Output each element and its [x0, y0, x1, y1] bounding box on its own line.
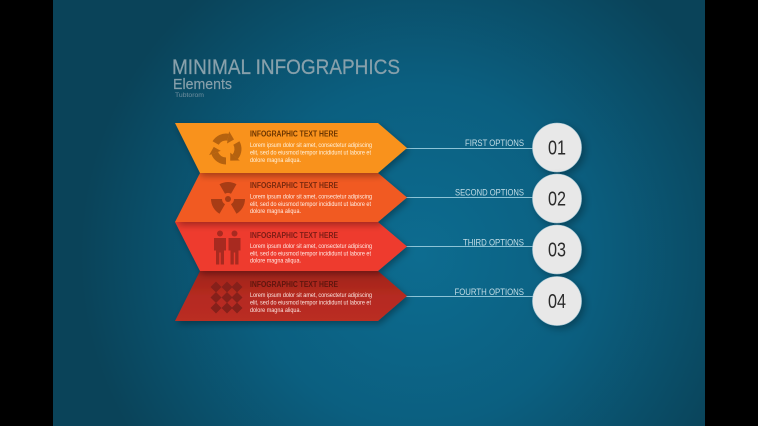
icon: two people [214, 230, 240, 264]
text block: row 2: elit, sed do eiusmod tempor incididunt ut labore et [250, 201, 371, 208]
number circle 01: 01 [548, 138, 566, 160]
option labels: THIRD OPTIONS [463, 238, 524, 248]
text block: row 4: INFOGRAPHIC TEXT HERE [250, 280, 339, 289]
icon: radiation [211, 182, 245, 214]
text block: row 4 [250, 280, 372, 314]
number circle 02 [532, 174, 582, 223]
text block: row 3: INFOGRAPHIC TEXT HERE [250, 231, 339, 240]
text block: row 2: INFOGRAPHIC TEXT HERE [250, 181, 339, 190]
text block: row 1 [250, 130, 372, 164]
number circle 04: 04 [548, 291, 566, 313]
arrow panel stack [175, 123, 407, 321]
text block: row 1: dolore magna aliqua. [250, 157, 301, 164]
icon: recycling [207, 131, 247, 167]
option labels: FIRST OPTIONS [465, 138, 524, 148]
text block: row 4: Lorem ipsum dolor sit amet, consectetur adipiscing [250, 292, 372, 299]
text block: row 4: dolore magna aliqua. [250, 307, 301, 314]
connector lines [405, 148, 535, 296]
panel: row 1 arrow [175, 123, 407, 173]
number circle 02: 02 [548, 188, 566, 210]
option labels: FOURTH OPTIONS [454, 287, 524, 297]
text block: row 1: INFOGRAPHIC TEXT HERE [250, 130, 339, 138]
text block: row 2: dolore magna aliqua. [250, 208, 301, 215]
number circle 03 [532, 225, 582, 274]
text block: row 4: elit, sed do eiusmod tempor incididunt ut labore et [250, 300, 371, 306]
text block: row 3: dolore magna aliqua. [250, 258, 301, 264]
option labels: SECOND OPTIONS [455, 188, 524, 198]
option labels [454, 138, 524, 297]
title block [172, 56, 400, 99]
subtitle: Elements [173, 76, 232, 93]
text block: row 3: Lorem ipsum dolor sit amet, consectetur adipiscing [250, 243, 372, 250]
panel: row 4 arrow [175, 271, 407, 321]
number circle 01 [532, 123, 582, 172]
caption: Tubtorom [175, 92, 204, 99]
text block: row 1: Lorem ipsum dolor sit amet, consectetur adipiscing [250, 142, 372, 149]
icon: diamond grid [210, 282, 242, 314]
text block: row 3: elit, sed do eiusmod tempor incididunt ut labore et [250, 250, 371, 258]
text block: row 2 [250, 181, 372, 215]
number circle 04 [532, 276, 582, 326]
text block: row 3 [250, 231, 372, 264]
text block: row 1: elit, sed do eiusmod tempor incididunt ut labore et [250, 150, 371, 156]
panel: row 2 arrow [175, 173, 407, 222]
title: MINIMAL INFOGRAPHICS [172, 56, 400, 79]
number circle 03: 03 [548, 240, 566, 262]
panel: row 3 arrow [175, 222, 407, 271]
text block: row 2: Lorem ipsum dolor sit amet, consectetur adipiscing [250, 194, 372, 200]
